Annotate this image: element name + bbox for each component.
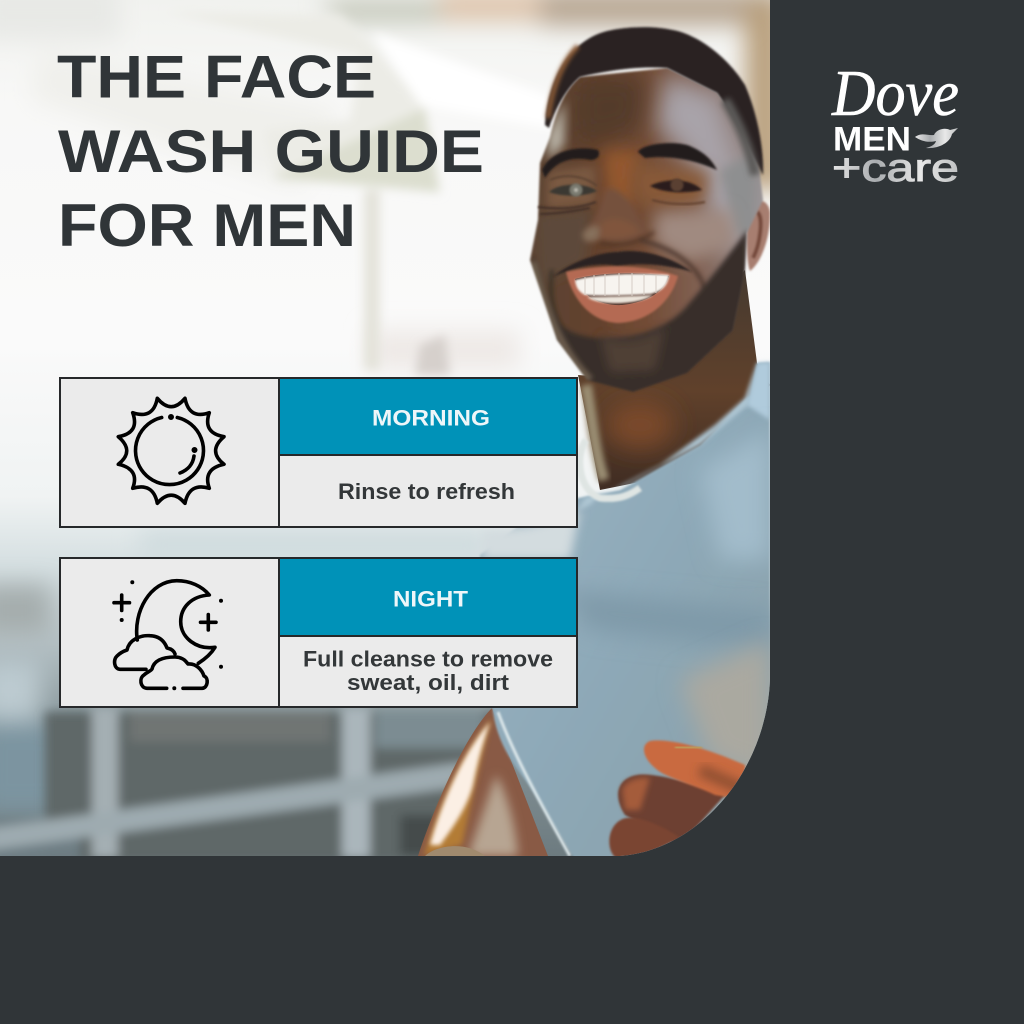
cheek left: [543, 212, 590, 272]
photo: smiling man running: [0, 0, 785, 862]
text: rinse to refresh: Rinse to refresh: [338, 479, 515, 504]
mouth: [566, 266, 678, 323]
panel: morning: [60, 378, 577, 527]
beard: [532, 230, 747, 395]
heading bar: night: [279, 558, 577, 636]
title: WASH GUIDE: [58, 117, 484, 185]
right side fade: [720, 160, 755, 233]
moustache: [553, 251, 692, 277]
neck: [578, 270, 770, 490]
shirt collar: [578, 362, 770, 510]
text: full cleanse: sweat, oil, dirt: [347, 670, 510, 695]
icon cell: morning: [60, 378, 279, 527]
panel: night: [60, 558, 577, 707]
title: FOR MEN: [58, 191, 356, 259]
ear: [747, 201, 770, 271]
arm: [418, 708, 548, 856]
shirt: [480, 362, 770, 860]
logo: Dove Men+Care: +care: [832, 147, 959, 190]
shirt shading: [482, 430, 770, 856]
text cell: night: [279, 636, 577, 707]
heading: night: NIGHT: [393, 586, 469, 612]
lower teeth: [587, 295, 653, 303]
icon: dove bird: [915, 128, 958, 148]
cheek right: [655, 210, 735, 262]
text: full cleanse: [303, 646, 553, 695]
blurred railing background bottom: [0, 530, 505, 862]
logo: Dove Men+Care: MEN: [833, 120, 911, 158]
heading bar: morning: [279, 378, 577, 455]
title: [57, 42, 484, 259]
logo: Dove Men+Care: [831, 57, 959, 190]
forehead light: [655, 75, 750, 260]
text cell: morning: [279, 455, 577, 527]
nose: [591, 188, 639, 241]
hand: [609, 740, 745, 858]
eye socket warmth: [602, 150, 640, 215]
face: [530, 68, 763, 395]
icon: moon and clouds: [114, 581, 222, 689]
smile lines: [640, 240, 705, 290]
eyebrows: [542, 143, 717, 178]
icon: sun: [118, 398, 224, 503]
hair: [545, 27, 763, 175]
blurred stadium background top: [0, 0, 785, 375]
heading: morning: MORNING: [372, 406, 490, 430]
logo: Dove Men+Care: Dove: [831, 57, 959, 130]
icon cell: night: [60, 558, 279, 707]
text: full cleanse: Full cleanse to remove: [303, 646, 553, 672]
eyes: [538, 176, 705, 214]
title: THE FACE: [57, 42, 376, 110]
temple: [548, 100, 565, 160]
upper teeth: [575, 274, 669, 296]
